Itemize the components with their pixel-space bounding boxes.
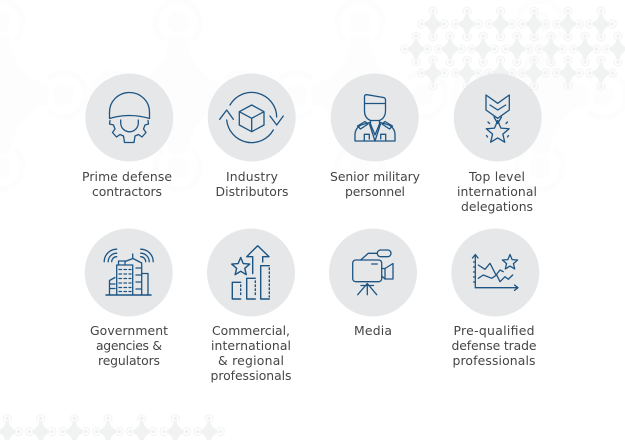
panel: senior military personnel <box>330 74 420 199</box>
background: small cross pattern bottom left <box>0 415 224 440</box>
icon: helmet and gear <box>110 92 150 142</box>
panel: government agencies and regulators <box>85 228 173 368</box>
panel: commercial, international and regional professionals <box>207 228 295 383</box>
label: industry distributors: Industry <box>226 169 278 184</box>
icon: line chart with star <box>472 254 518 290</box>
label: senior military personnel: Senior military <box>330 169 420 184</box>
label: top level international delegations: international <box>457 184 537 199</box>
label: top level international delegations: delegations <box>461 199 533 214</box>
panel: prime defense contractors <box>82 74 173 199</box>
label: commercial, international and regional professionals: Commercial, <box>212 323 290 338</box>
label: government agencies and regulators <box>90 323 168 368</box>
label: industry distributors: Distributors <box>216 184 288 199</box>
label: commercial, international and regional professionals: & regional <box>218 353 284 368</box>
label: government agencies and regulators: Government <box>90 323 168 338</box>
icon: growth bars, star and arrow <box>232 246 269 299</box>
label: prime defense contractors <box>82 169 172 199</box>
background: large faint cross pattern <box>0 1 625 189</box>
label: pre-qualified defense trade professionals: professionals <box>452 353 536 368</box>
panel: industry distributors <box>208 74 296 199</box>
label: top level international delegations <box>457 169 537 214</box>
label: pre-qualified defense trade professionals: Pre-qualified <box>454 323 534 338</box>
icon: city buildings with signal <box>104 249 153 295</box>
label: top level international delegations: Top level <box>468 169 525 184</box>
label: commercial, international and regional professionals: professionals <box>210 368 292 383</box>
panel: top level international delegations <box>454 74 542 214</box>
label: commercial, international and regional professionals <box>210 323 292 383</box>
label: government agencies and regulators: regulators <box>98 353 160 368</box>
label: media: Media <box>354 323 392 338</box>
label: prime defense contractors: contractors <box>92 184 162 199</box>
icon: cube with cycle arrows <box>220 92 283 143</box>
background: small cross pattern top right <box>401 7 625 90</box>
panel: media <box>329 228 417 338</box>
label: senior military personnel: personnel <box>345 184 405 199</box>
label: pre-qualified defense trade professionals <box>452 323 536 368</box>
icon: medal <box>486 95 509 142</box>
label: senior military personnel <box>330 169 420 199</box>
panel: pre-qualified defense trade professionals <box>451 228 539 368</box>
icon: video camera on tripod <box>353 250 393 295</box>
label: prime defense contractors: Prime defense <box>82 169 172 184</box>
label: commercial, international and regional professionals: international <box>211 338 291 353</box>
icon: soldier <box>355 95 395 141</box>
label: pre-qualified defense trade professionals: defense trade <box>452 338 536 353</box>
label: government agencies and regulators: agencies & <box>96 338 162 353</box>
label: industry distributors <box>216 169 288 199</box>
